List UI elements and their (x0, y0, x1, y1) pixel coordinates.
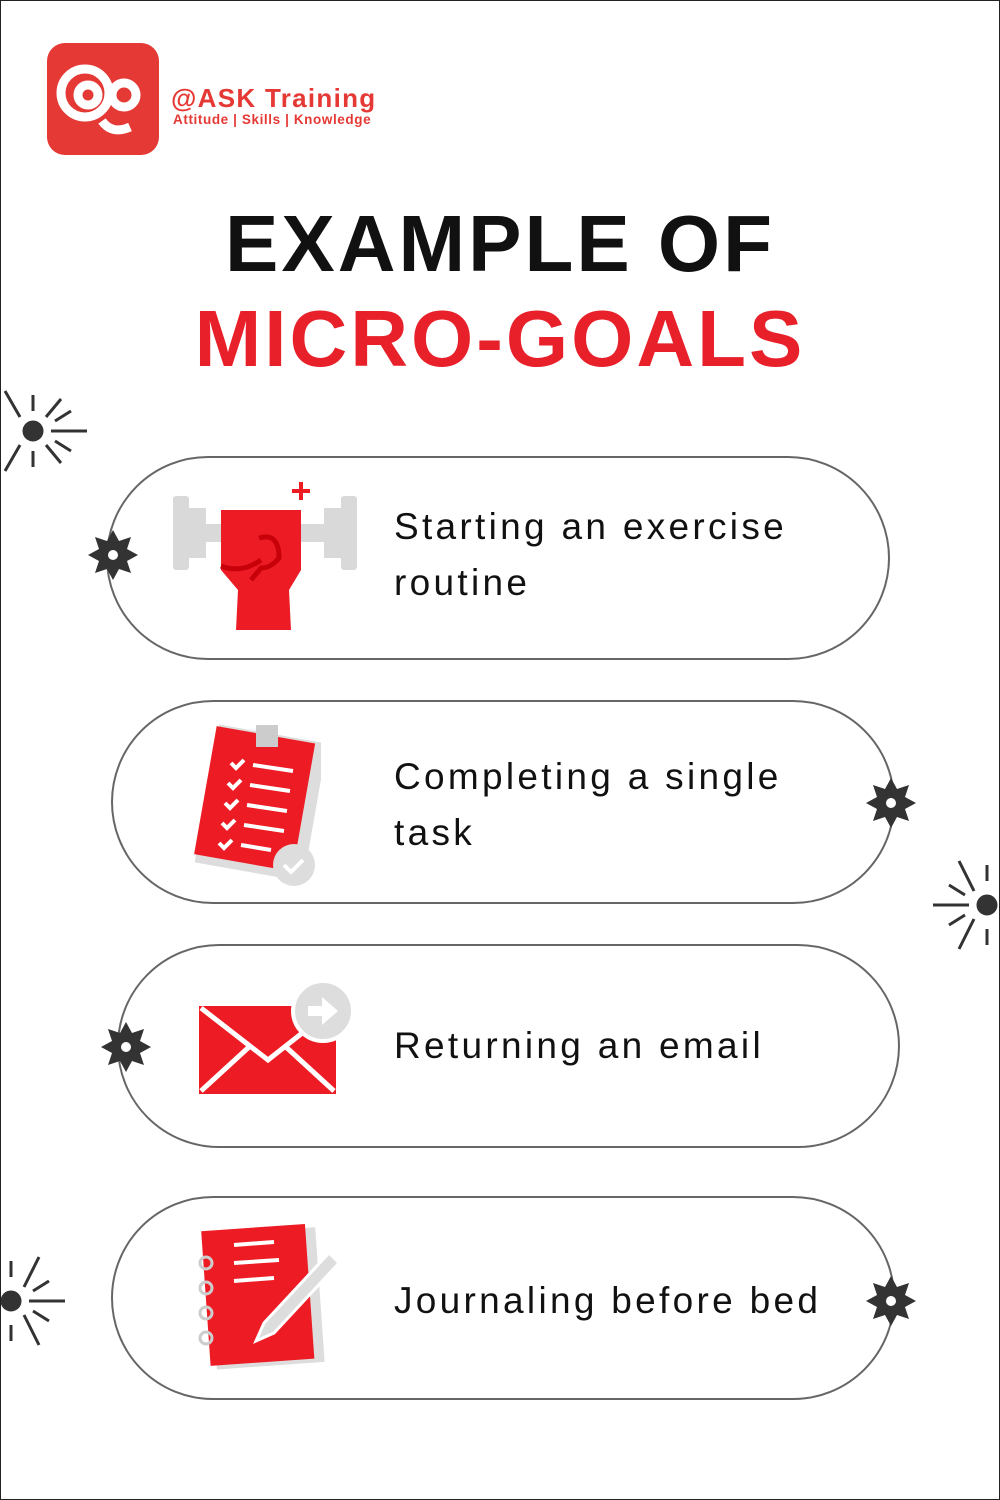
text 1: Starting an exercise (394, 506, 787, 547)
text 2 (394, 756, 782, 853)
logo: @ASK Training (171, 83, 376, 113)
text 2: Completing a single (394, 756, 782, 797)
icon: journal (198, 1224, 337, 1370)
text 2: task (394, 812, 475, 853)
icon: email (199, 983, 351, 1094)
logo: Attitude | Skills | Knowledge (173, 112, 371, 127)
text 3: Returning an email (394, 1025, 764, 1066)
icon: dumbbell fist (173, 482, 357, 630)
logo (47, 43, 376, 155)
title (195, 199, 805, 383)
text 1: routine (394, 562, 530, 603)
icon: checklist (194, 724, 321, 886)
text 4: Journaling before bed (394, 1280, 821, 1321)
text 1 (394, 506, 787, 603)
title: EXAMPLE OF (225, 199, 775, 288)
title: MICRO-GOALS (195, 294, 805, 383)
